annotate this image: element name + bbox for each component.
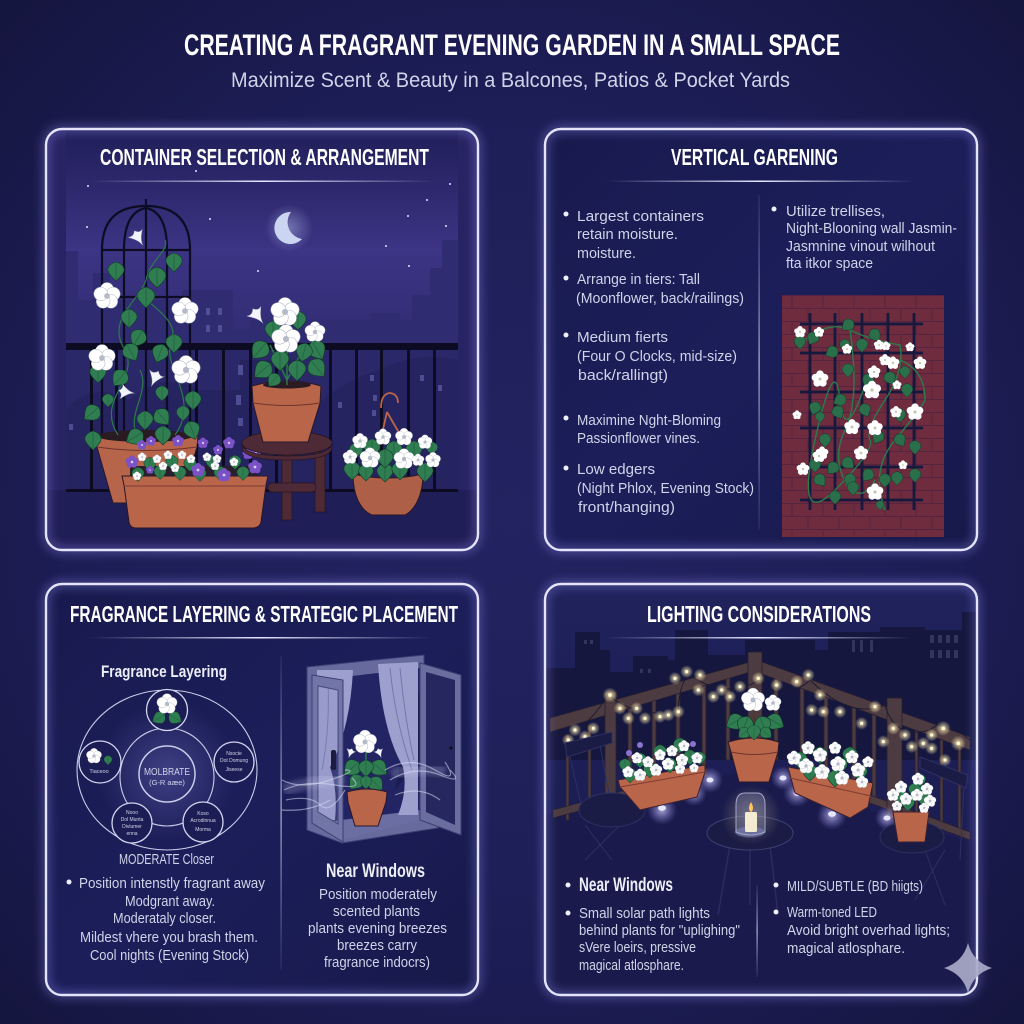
bullet list: left column: Maximine Nght-Bloming bbox=[577, 412, 721, 429]
panel heading: CONTAINER SELECTION & ARRANGEMENT bbox=[100, 144, 429, 170]
diagram: fragrance layering circles: Nsocte bbox=[226, 751, 242, 757]
bullet list: left column: (Four O Clocks, mid-size) bbox=[577, 348, 737, 365]
brick wall with jasmine trellis bbox=[782, 295, 944, 537]
moonflower vine bbox=[79, 227, 203, 450]
solar path lights bbox=[647, 766, 899, 830]
text block: left lighting tips: Near Windows bbox=[579, 875, 673, 896]
text block: placement list: Modgrant away. bbox=[125, 893, 215, 910]
left flower box bbox=[618, 738, 706, 810]
bullet list: left column: moisture. bbox=[577, 245, 636, 262]
bullet list: right column: Night-Blooning wall Jasmin- bbox=[786, 220, 957, 237]
text block: right lighting tips bbox=[774, 878, 950, 957]
night sky scene bbox=[46, 129, 478, 550]
text block: right lighting tips: MILD/SUBTLE (BD hiigts) bbox=[787, 878, 923, 895]
bullet list: right column bbox=[772, 203, 957, 272]
diagram: fragrance layering circles: Koso bbox=[197, 811, 209, 817]
diagram: fragrance layering circles: Tiaceoo bbox=[89, 769, 109, 775]
text block: near windows description bbox=[308, 886, 447, 971]
text block: placement list: Position intenstly fragrant away bbox=[79, 875, 265, 892]
icon: crescent moon bbox=[268, 207, 310, 249]
terracotta pot with flowering plant bbox=[245, 297, 331, 442]
text block: right lighting tips: magical atlosphare. bbox=[787, 940, 905, 957]
bullet list: left column: back/rallingt) bbox=[578, 367, 668, 384]
text block: placement list: Mildest vhere you brash them. bbox=[80, 929, 258, 946]
right bistro table and chair bbox=[880, 757, 968, 905]
center table with candle jar bbox=[707, 785, 793, 915]
bullet list: left column: Arrange in tiers: Tall bbox=[577, 271, 700, 288]
bullet list: left column: Largest containers bbox=[577, 208, 704, 225]
panel: lighting considerations bbox=[546, 606, 976, 977]
balcony railing bbox=[66, 343, 458, 492]
diagram: fragrance layering circles: Morma bbox=[195, 827, 211, 833]
large pot bbox=[92, 430, 198, 503]
text block: right lighting tips: Warm-toned LED bbox=[787, 904, 877, 921]
diagram: fragrance layering circles bbox=[77, 690, 257, 850]
text block: placement list: Moderataly closer. bbox=[113, 910, 216, 927]
panel outlines with glow bbox=[46, 129, 977, 995]
string lights bbox=[552, 665, 975, 766]
text block: near windows description: breezes carry bbox=[337, 937, 417, 954]
bullet list: left column: retain moisture. bbox=[577, 226, 678, 243]
panel heading: FRAGRANCE LAYERING & STRATEGIC PLACEMENT bbox=[70, 601, 458, 627]
text block: placement list bbox=[66, 875, 265, 964]
diagram caption: MODERATE Closer bbox=[119, 851, 214, 868]
right small pot with flowers bbox=[886, 773, 937, 842]
center pot with flowers bbox=[726, 688, 784, 782]
bullet list: left column: (Moonflower, back/railings) bbox=[576, 290, 744, 307]
bullet list: left column: Low edgers bbox=[577, 461, 655, 478]
diagram: fragrance layering circles: (G-R aæe) bbox=[149, 778, 185, 787]
panel: container selection and arrangement bbox=[46, 129, 478, 550]
text block: near windows description: scented plants bbox=[333, 903, 420, 920]
left bistro chair bbox=[565, 732, 645, 860]
diagram: fragrance layering circles: enna bbox=[126, 831, 138, 837]
text block: left lighting tips: behind plants for "uplighing" bbox=[579, 922, 740, 939]
text block: left lighting tips: magical atlosphare. bbox=[579, 957, 684, 974]
left open door bbox=[312, 675, 343, 842]
diagram: fragrance layering circles: Acrodinnua bbox=[190, 818, 216, 824]
text block: near windows description: Position moderately bbox=[319, 886, 437, 903]
text block: right lighting tips: Avoid bright overhad lights; bbox=[787, 922, 950, 939]
curtains bbox=[317, 670, 353, 822]
diagram: fragrance layering circles: MOLBRATE bbox=[144, 766, 190, 778]
text block: left lighting tips bbox=[566, 875, 740, 974]
bullet list: left column bbox=[564, 208, 754, 516]
bullet list: left column: (Night Phlox, Evening Stock) bbox=[577, 480, 754, 497]
subheading: near windows: Near Windows bbox=[326, 861, 425, 882]
diagram: fragrance layering circles: Diviumer bbox=[122, 824, 142, 830]
evening breeze lines bbox=[282, 762, 456, 810]
hanging basket bbox=[342, 393, 442, 515]
diagram: fragrance layering circles: Nooo bbox=[126, 810, 138, 816]
bullet list: left column: front/hanging) bbox=[578, 499, 675, 516]
diagram: fragrance layering circles: Dot Domung bbox=[220, 758, 248, 764]
diagram: fragrance layering circles: Dol Munta bbox=[121, 817, 144, 823]
panel heading: LIGHTING CONSIDERATIONS bbox=[647, 601, 871, 627]
right open door bbox=[420, 663, 461, 835]
text block: placement list: Cool nights (Evening Stock) bbox=[90, 947, 249, 964]
icon: sparkle star bbox=[944, 943, 992, 993]
text block: left lighting tips: sVere loeirs, pressive bbox=[579, 939, 696, 956]
bullet list: right column: Jasmnine vinout wilhout bbox=[786, 238, 936, 255]
bullet list: right column: fta itkor space bbox=[786, 255, 873, 272]
bullet list: right column: Utilize trellises, bbox=[786, 203, 885, 220]
text block: near windows description: plants evening breezes bbox=[308, 920, 447, 937]
potted plant bbox=[365, 750, 367, 790]
subheading: fragrance layering: Fragrance Layering bbox=[101, 662, 227, 681]
window box with purple and white flowers bbox=[122, 435, 268, 528]
text block: near windows description: fragrance indocrs) bbox=[324, 954, 430, 971]
wooden stool bbox=[242, 431, 332, 520]
arched trellis bbox=[102, 199, 190, 440]
right flower box bbox=[786, 741, 874, 818]
panel: fragrance layering and strategic placement bbox=[46, 584, 478, 995]
subtitle: Maximize Scent & Beauty in a Balcones, Patios & Pocket Yards bbox=[231, 69, 790, 92]
panel: vertical gardening bbox=[545, 129, 977, 550]
panel heading: VERTICAL GARENING bbox=[671, 144, 838, 170]
bullet list: left column: Medium fierts bbox=[577, 329, 668, 346]
illustration: open window with potted plant bbox=[282, 655, 461, 843]
diagram: fragrance layering circles: Jiseese bbox=[226, 767, 243, 773]
city skyline bbox=[545, 612, 977, 760]
wooden railing bbox=[550, 652, 970, 840]
text block: left lighting tips: Small solar path lights bbox=[579, 905, 710, 922]
deck floor bbox=[718, 774, 778, 788]
bullet list: left column: Passionflower vines. bbox=[577, 430, 700, 447]
